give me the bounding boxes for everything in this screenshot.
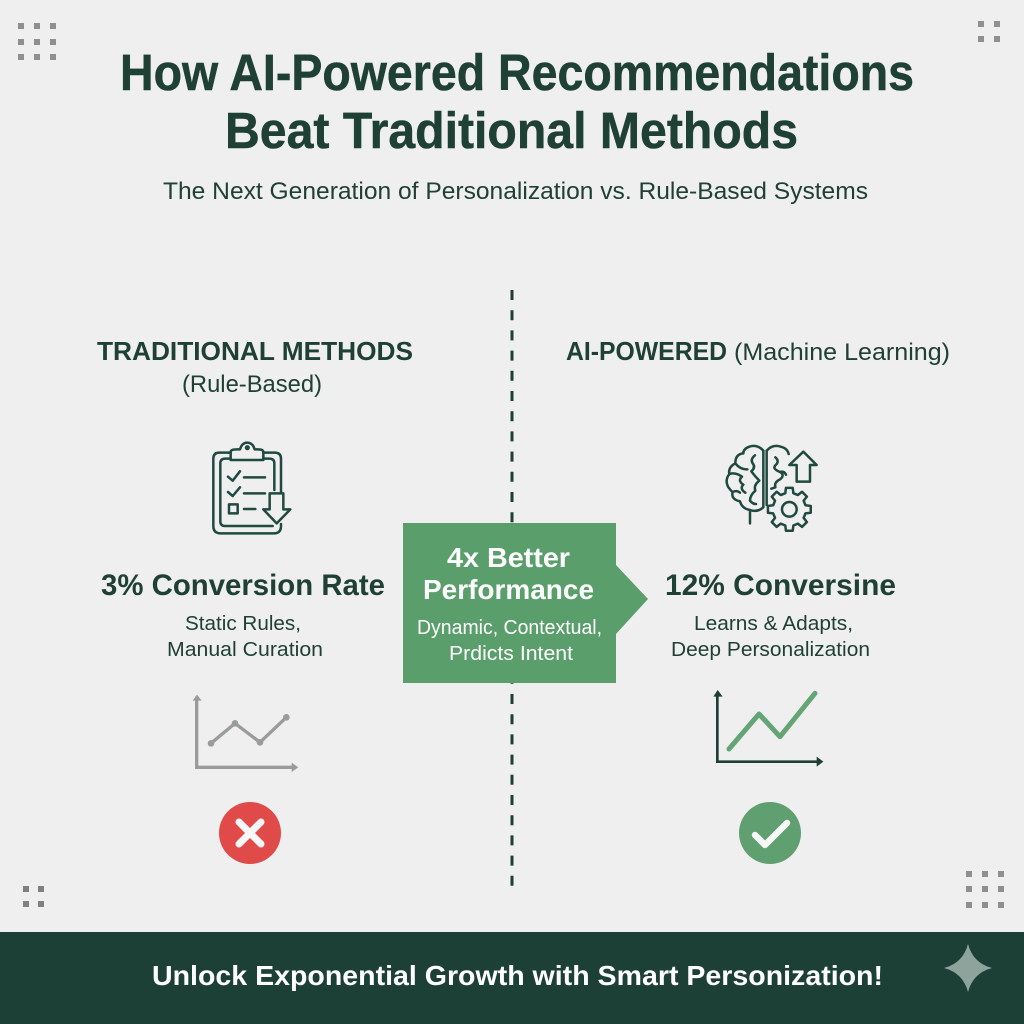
footer banner [0,932,1024,1024]
icon: red cross [219,802,281,864]
footer banner: Unlock Exponential Growth with Smart Personization! [152,960,883,991]
chart: rising green line [713,690,823,767]
callout: 4x better performance [403,523,648,683]
callout: 4x better performance: Performance [423,574,594,605]
description: static rules: Manual Curation [167,639,323,661]
title: How AI-Powered Recommendations [120,44,914,101]
heading: traditional methods [97,336,413,398]
panel: traditional methods [97,336,413,864]
title: Beat Traditional Methods [225,102,798,159]
description: learns and adapts [671,613,870,661]
icon: green check [739,802,801,864]
icon: sparkle star [944,944,992,992]
stat: 12% conversine: 12% Conversine [665,569,896,602]
description: learns and adapts: Learns & Adapts, [694,613,853,635]
panel: AI-powered [566,336,950,864]
decorative dots: top left [18,23,56,60]
callout: 4x better performance: 4x Better [447,542,570,573]
icon: clipboard checklist with down arrow [213,443,290,533]
description: static rules [167,613,323,661]
heading: AI-powered [566,336,950,366]
stat: 3% conversion rate: 3% Conversion Rate [101,569,385,602]
heading: traditional methods: TRADITIONAL METHODS [97,336,413,366]
title [120,44,914,159]
subtitle: The Next Generation of Personalization vs. Rule-Based Systems [163,178,868,205]
decorative dots: top right [978,21,1000,42]
callout: 4x better performance: Prdicts Intent [449,643,573,665]
heading: AI-powered: (Machine Learning) [734,339,950,366]
heading: AI-powered: AI-POWERED [566,336,727,366]
decorative dots: bottom right [966,871,1004,908]
heading: traditional methods: (Rule-Based) [182,371,322,398]
icon: brain with gear and up arrow [727,446,817,531]
callout: 4x better performance: Dynamic, Contextual, [417,617,602,639]
decorative dots: bottom left [23,886,44,907]
description: learns and adapts: Deep Personalization [671,639,870,661]
chart: flat gray line [193,695,298,772]
description: static rules: Static Rules, [185,613,301,635]
center dashed divider [510,290,514,896]
